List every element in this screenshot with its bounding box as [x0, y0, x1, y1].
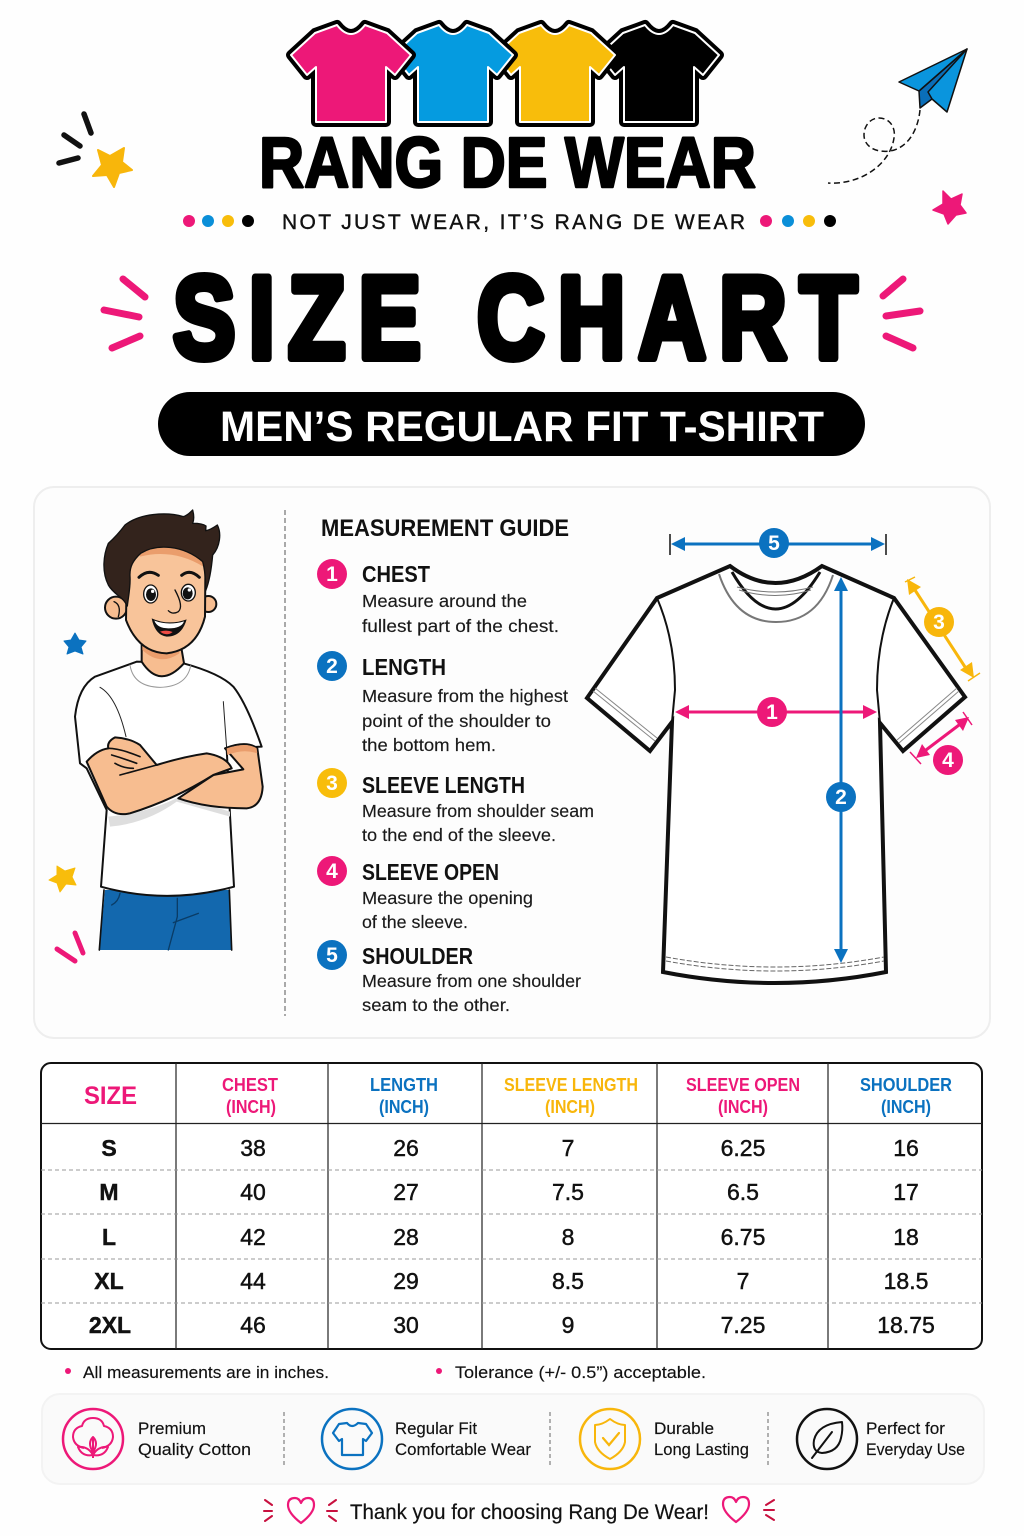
- table row 2XL: 18.75: [877, 1312, 935, 1338]
- feature: durable: [580, 1409, 749, 1469]
- decoration: sparks and yellow star: [59, 114, 132, 187]
- table row S: S: [101, 1135, 117, 1161]
- heading: size chart: [173, 253, 857, 383]
- tagline dots right: [760, 215, 836, 227]
- feature: everyday use: Perfect for: [866, 1419, 945, 1438]
- arrow 5: shoulder: 5: [768, 532, 780, 555]
- table row M: 27: [393, 1179, 419, 1205]
- table row S: 6.25: [721, 1135, 765, 1161]
- feature: durable: Durable: [654, 1419, 714, 1438]
- decoration: yellow star: [49, 866, 76, 892]
- table header: SIZE: [84, 1082, 137, 1110]
- table row L: 6.75: [721, 1224, 765, 1250]
- guide item 5: shoulder: Measure from one shoulder: [362, 971, 581, 991]
- heading: size chart: SIZE: [173, 253, 421, 383]
- guide item 5: shoulder: seam to the other.: [362, 995, 510, 1015]
- table row XL: 18.5: [884, 1268, 928, 1294]
- table row 2XL: 9: [562, 1312, 574, 1338]
- logo: four coloured t-shirts: [291, 25, 719, 122]
- arrow 1: chest: 1: [766, 701, 778, 724]
- arrow 2: length: 2: [835, 786, 847, 809]
- guide item 1: chest: [317, 559, 559, 636]
- decoration: pink marks: [57, 933, 83, 961]
- table row L: [102, 1224, 919, 1250]
- tagline: NOT JUST WEAR, IT’S RANG DE WEAR: [282, 211, 745, 234]
- subtitle pill: MEN’S REGULAR FIT T-SHIRT: [220, 403, 824, 451]
- table row L: 8: [562, 1224, 574, 1250]
- table row S: 7: [562, 1135, 574, 1161]
- table row XL: 8.5: [552, 1268, 584, 1294]
- table header: SLEEVE LENGTH: [504, 1075, 638, 1095]
- subtitle pill: [158, 392, 865, 456]
- panel: measurement guide: [34, 487, 990, 1038]
- table header: SLEEVE OPEN: [686, 1075, 800, 1095]
- guide item 2: length: the bottom hem.: [362, 735, 496, 755]
- tagline dots left: [183, 215, 254, 227]
- table row 2XL: [89, 1312, 935, 1338]
- table row S: 38: [240, 1135, 266, 1161]
- guide item 3: sleeve length: to the end of the sleeve.: [362, 825, 556, 845]
- arrow 3: sleeve length: 3: [933, 611, 945, 634]
- note: tolerance: Tolerance (+/- 0.5”) acceptable.: [455, 1363, 706, 1382]
- guide item 4: sleeve open: of the sleeve.: [362, 912, 468, 932]
- decoration: paper plane with dashed trail: [828, 49, 967, 183]
- arrow 2: length: [826, 577, 856, 963]
- table row L: 18: [893, 1224, 919, 1250]
- table header: (INCH): [718, 1097, 768, 1117]
- feature: everyday use: Everyday Use: [866, 1440, 965, 1459]
- brand name: RANG DE WEAR: [259, 124, 756, 203]
- arrow 4: sleeve open: 4: [942, 749, 954, 772]
- table row XL: XL: [94, 1268, 124, 1294]
- guide item 2: length: Measure from the highest: [362, 686, 568, 706]
- guide item 4: sleeve open: Measure the opening: [362, 888, 533, 908]
- table header: (INCH): [545, 1097, 595, 1117]
- guide item 2: length: 2: [326, 655, 338, 678]
- arrow 3: sleeve length: [905, 577, 980, 681]
- table header: (INCH): [379, 1097, 429, 1117]
- guide item 4: sleeve open: 4: [326, 860, 338, 883]
- guide item 1: chest: Measure around the: [362, 591, 527, 611]
- table row M: [99, 1179, 919, 1205]
- guide item 2: length: LENGTH: [362, 654, 446, 680]
- feature: regular fit: [322, 1409, 531, 1469]
- table row XL: 7: [737, 1268, 749, 1294]
- burst left of heading: [104, 279, 145, 348]
- decoration: pink star: [933, 191, 966, 224]
- table row S: 26: [393, 1135, 419, 1161]
- guide item 2: length: [317, 651, 568, 755]
- table row L: 28: [393, 1224, 419, 1250]
- guide item 1: chest: CHEST: [362, 561, 430, 587]
- table row XL: 44: [240, 1268, 266, 1294]
- guide item 5: shoulder: 5: [326, 944, 338, 967]
- note: units: All measurements are in inches.: [83, 1363, 329, 1382]
- guide item 4: sleeve open: SLEEVE OPEN: [362, 859, 499, 885]
- footer thank-you message: [264, 1497, 774, 1524]
- feature: regular fit: Regular Fit: [395, 1419, 477, 1438]
- feature: premium cotton: Quality Cotton: [138, 1440, 251, 1459]
- table row L: 42: [240, 1224, 266, 1250]
- guide item 4: sleeve open: [317, 856, 533, 932]
- illustration: smiling man with crossed arms: [75, 510, 263, 950]
- diagram: t-shirt outline with measurements: [587, 528, 980, 983]
- guide item 5: shoulder: SHOULDER: [362, 943, 473, 969]
- size table: [41, 1063, 982, 1349]
- feature: durable: Long Lasting: [654, 1440, 749, 1459]
- table header: (INCH): [881, 1097, 931, 1117]
- guide item 1: chest: 1: [326, 563, 338, 586]
- guide item 3: sleeve length: [317, 768, 594, 845]
- guide item 1: chest: fullest part of the chest.: [362, 616, 559, 636]
- table row L: L: [102, 1224, 116, 1250]
- table row M: M: [99, 1179, 119, 1205]
- table row 2XL: 30: [393, 1312, 419, 1338]
- table row XL: [94, 1268, 928, 1294]
- guide item 3: sleeve length: Measure from shoulder seam: [362, 801, 594, 821]
- feature: premium cotton: [63, 1409, 251, 1469]
- arrow 1: chest: [675, 697, 877, 727]
- table row M: 17: [893, 1179, 919, 1205]
- guide item 2: length: point of the shoulder to: [362, 711, 551, 731]
- heading: size chart: CHART: [477, 253, 857, 383]
- feature: everyday use: [797, 1409, 965, 1469]
- decoration: blue star: [64, 633, 86, 654]
- table header: (INCH): [226, 1097, 276, 1117]
- table row 2XL: 7.25: [721, 1312, 765, 1338]
- panel: features: [42, 1394, 984, 1484]
- table row 2XL: 46: [240, 1312, 266, 1338]
- guide heading: MEASUREMENT GUIDE: [321, 515, 569, 542]
- table header: CHEST: [222, 1075, 278, 1095]
- table row 2XL: 2XL: [89, 1312, 131, 1338]
- table row M: 40: [240, 1179, 266, 1205]
- arrow 4: sleeve open: [910, 712, 972, 775]
- feature: premium cotton: Premium: [138, 1419, 206, 1438]
- table header: LENGTH: [370, 1075, 438, 1095]
- burst right of heading: [883, 279, 920, 348]
- guide item 3: sleeve length: SLEEVE LENGTH: [362, 772, 525, 798]
- table header: [84, 1075, 952, 1117]
- feature: regular fit: Comfortable Wear: [395, 1440, 531, 1459]
- footer thank-you message: Thank you for choosing Rang De Wear!: [350, 1501, 709, 1524]
- table row S: [101, 1135, 919, 1161]
- table row M: 7.5: [552, 1179, 584, 1205]
- arrow 5: shoulder: [670, 528, 886, 558]
- guide item 3: sleeve length: 3: [326, 772, 338, 795]
- table row XL: 29: [393, 1268, 419, 1294]
- table header: SHOULDER: [860, 1075, 952, 1095]
- table row S: 16: [893, 1135, 919, 1161]
- guide item 5: shoulder: [317, 940, 581, 1015]
- table row M: 6.5: [727, 1179, 759, 1205]
